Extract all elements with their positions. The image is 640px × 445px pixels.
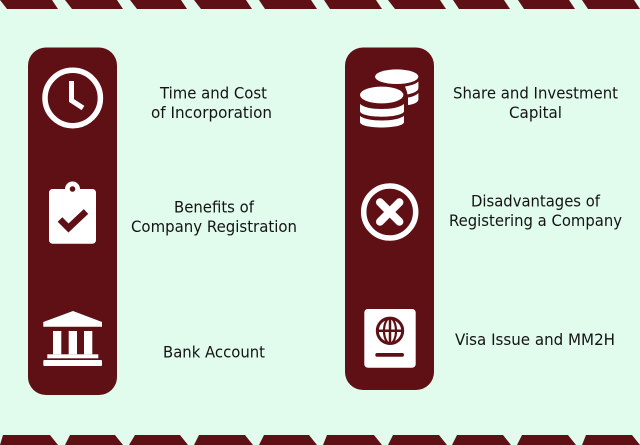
icon: passport	[364, 309, 416, 368]
text: share and investment capital: Capital	[509, 103, 562, 122]
icon: circled X	[364, 186, 416, 238]
text: time and cost of incorporation: Time and Cost	[159, 84, 267, 102]
text: bank account: Bank Account	[163, 342, 265, 362]
text: time and cost of incorporation	[151, 84, 272, 122]
icon: bank building	[43, 311, 102, 366]
panel: left icon column	[28, 48, 117, 395]
top stripe band	[0, 0, 640, 9]
text: benefits of company registration	[131, 198, 297, 236]
text: disadvantages of registering a company: Disadvantages of	[471, 192, 600, 211]
text: visa issue and mm2h: Visa Issue and MM2H	[455, 330, 615, 349]
text: benefits of company registration: Company Registration	[131, 217, 297, 236]
panel: right icon column	[345, 48, 434, 390]
text: disadvantages of registering a company	[449, 192, 622, 230]
icon: clock	[45, 70, 100, 126]
text: disadvantages of registering a company: Registering a Company	[449, 211, 622, 230]
text: share and investment capital: Share and Investment	[453, 84, 618, 102]
text: time and cost of incorporation: of Incorporation	[151, 103, 272, 122]
icon: clipboard with check	[49, 182, 96, 244]
text: share and investment capital	[453, 84, 618, 122]
bottom stripe band	[0, 435, 640, 445]
text: benefits of company registration: Benefits of	[174, 198, 254, 216]
icon: coin stacks	[360, 69, 418, 128]
